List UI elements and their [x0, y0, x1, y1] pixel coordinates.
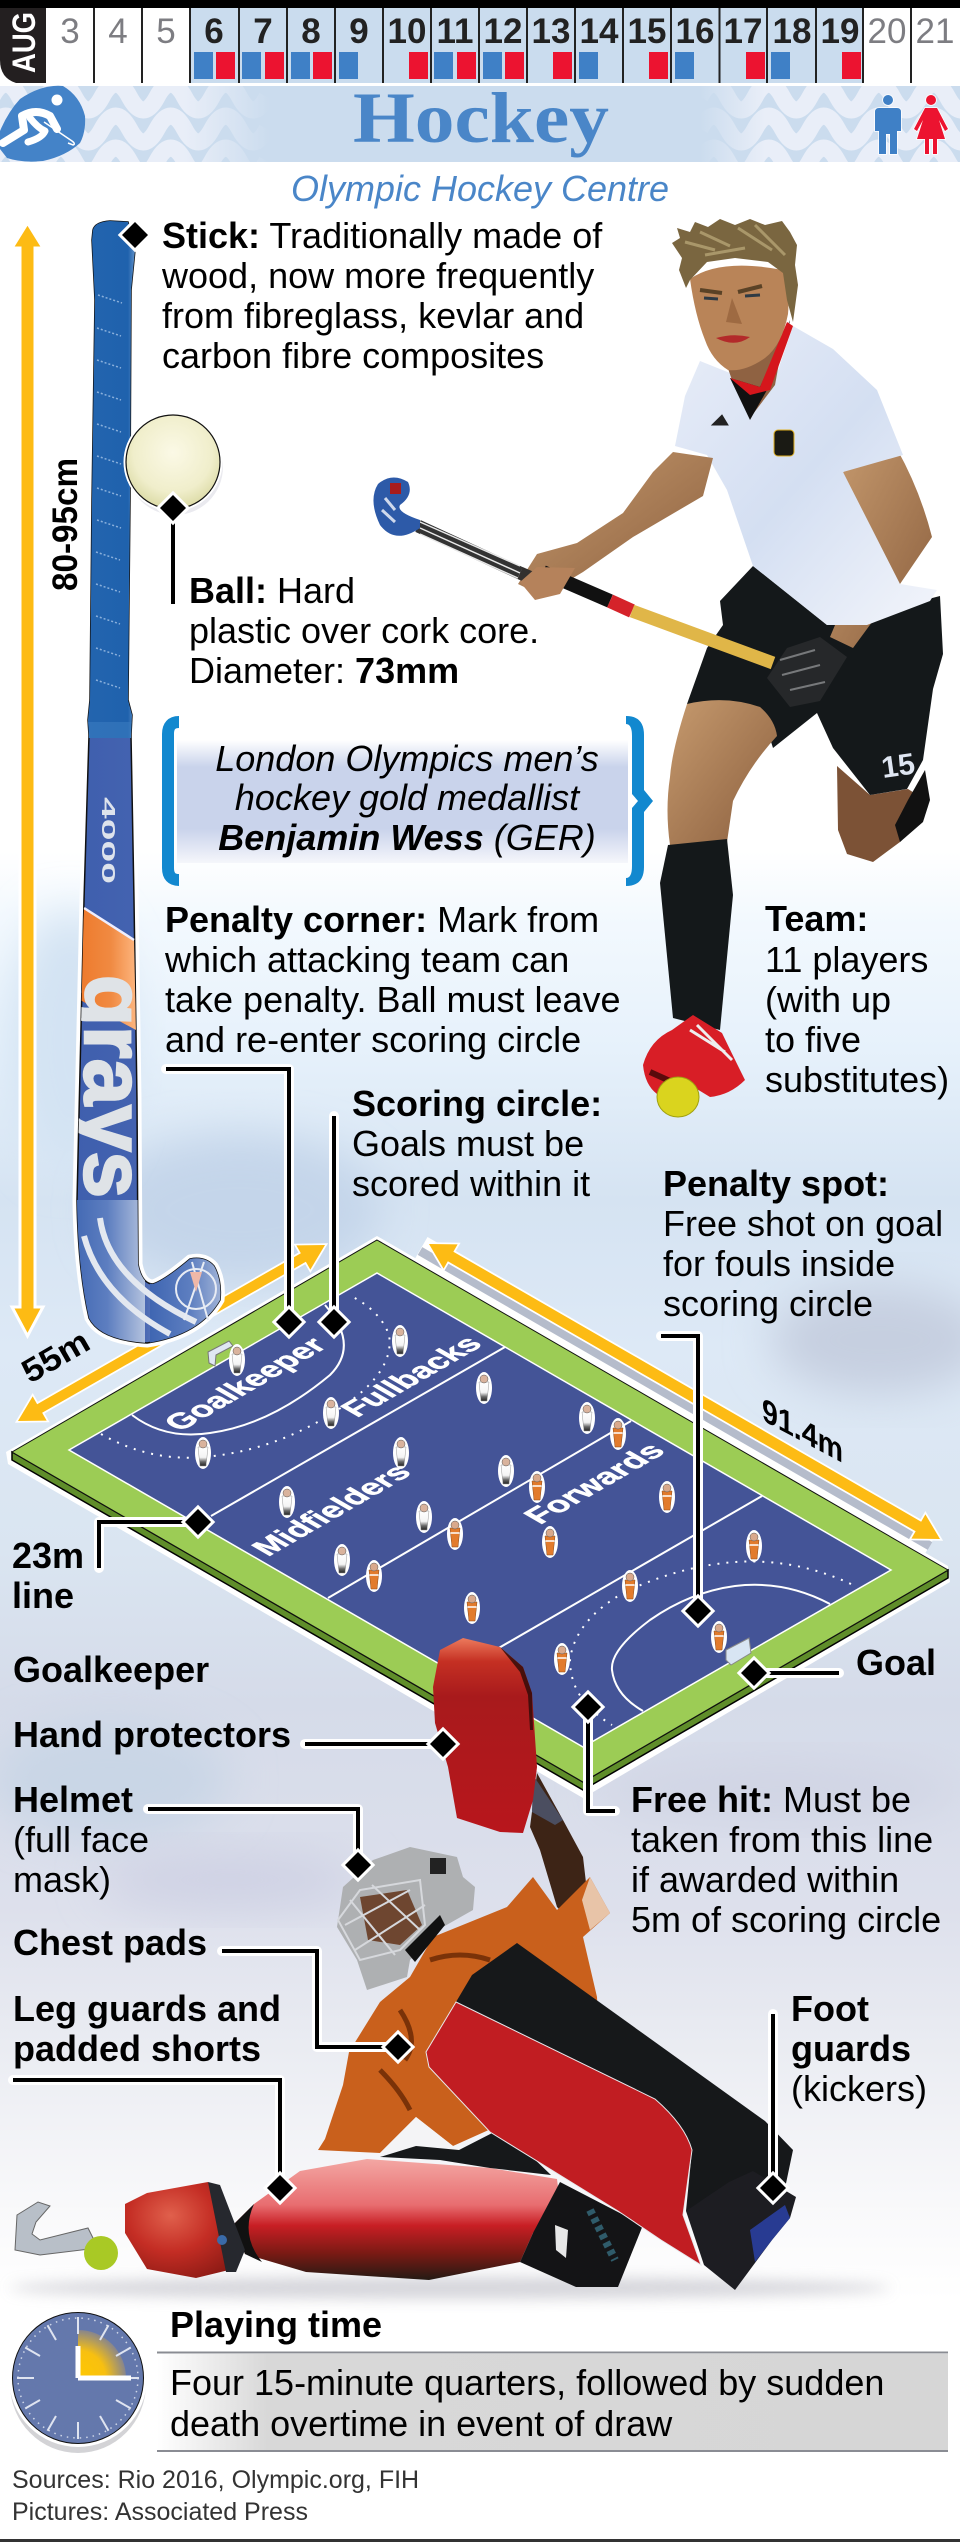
pointer: leg guards [13, 2080, 293, 2201]
calendar strip: August dates: 11 [436, 12, 474, 51]
arrow: pitch length 91.4m [429, 1244, 940, 1539]
photo illustration: goalkeeper [15, 1638, 796, 2290]
goalkeeper shorts [380, 2128, 551, 2175]
penalty corner text: Penalty corner: Mark from [165, 899, 599, 940]
calendar strip: August dates: 19 [821, 12, 859, 51]
player sock [660, 839, 733, 1030]
leg guards label [13, 1988, 281, 2069]
free hit text [631, 1779, 941, 1940]
month tab: AUG: AUG [6, 12, 42, 73]
pointer: scoring circle [321, 1116, 347, 1335]
penalty corner text: and re-enter scoring circle [165, 1019, 581, 1060]
helmet label: (full face [13, 1819, 149, 1860]
team text: substitutes) [765, 1059, 949, 1100]
player left arm [518, 452, 713, 596]
player right arm [830, 449, 932, 648]
raised leg pad: red side [426, 2002, 701, 2265]
held stick [373, 477, 773, 663]
stick text: Stick: Traditionally made of [162, 215, 603, 256]
calendar strip: August dates: 9 [349, 12, 369, 51]
stick text: carbon fibre composites [162, 335, 544, 376]
icon: male athlete [875, 95, 901, 154]
arrow: pitch width 55m [18, 1245, 325, 1421]
lower leg pad [233, 2159, 560, 2280]
calendar strip: August dates: 16 [676, 12, 714, 51]
ball text: Ball: Hard [189, 570, 355, 611]
playing time panel [157, 2304, 948, 2452]
player shorts [687, 566, 943, 795]
goalkeeper helmet [337, 1847, 475, 1990]
pitch label: Goalkeeper: Goalkeeper [156, 1333, 334, 1435]
calendar strip: August dates: 10 [388, 12, 426, 51]
dimension label: 55m: 55m [15, 1322, 96, 1390]
pointer: hand protectors [305, 1731, 456, 1757]
pointer: 23m line [99, 1509, 211, 1568]
goalkeeper heading: Goalkeeper [13, 1649, 209, 1690]
ball text: plastic over cork core. [189, 610, 539, 651]
stick text: from fibreglass, kevlar and [162, 295, 584, 336]
goal: left [208, 1341, 233, 1366]
23m line label [12, 1535, 84, 1616]
arrow: stick length 80-95cm [12, 223, 43, 1336]
pitch label: Fullbacks: Fullbacks [333, 1331, 490, 1421]
red hand glove [125, 2182, 239, 2278]
pointer: helmet [148, 1809, 371, 1878]
goal: right [726, 1638, 751, 1665]
ball under foot [657, 1077, 699, 1117]
penalty corner text: take penalty. Ball must leave [165, 979, 621, 1020]
free hit text: taken from this line [631, 1819, 933, 1860]
dimension label: 91.4m: 91.4m [762, 1390, 843, 1470]
player face [690, 266, 788, 370]
scoring circle text: scored within it [352, 1163, 590, 1204]
raised leg pad: black side [456, 1943, 793, 2211]
23m line label: 23m [12, 1535, 84, 1576]
boot lower [520, 2182, 643, 2287]
penalty spot text: Free shot on goal [663, 1203, 943, 1244]
title band with wave pattern [0, 86, 960, 162]
penalty corner text [164, 899, 621, 1060]
leg guards label: padded shorts [13, 2028, 261, 2069]
player glove [767, 637, 847, 707]
pointer: penalty spot [661, 1336, 711, 1624]
foot guards label: (kickers) [791, 2068, 927, 2109]
stick model number: 4000 [98, 797, 118, 884]
players: orange team [366, 1418, 762, 1675]
penalty spot text: Penalty spot: [663, 1163, 889, 1204]
calendar strip: August dates: 14 [580, 12, 619, 51]
helmet label [13, 1779, 149, 1900]
free hit text: 5m of scoring circle [631, 1899, 941, 1940]
number on shorts: 15 [879, 748, 917, 785]
pointer: penalty corner [166, 1069, 302, 1335]
free hit text: if awarded within [631, 1859, 899, 1900]
scoring circle text [352, 1083, 602, 1204]
chest pads label: Chest pads [13, 1922, 207, 1963]
goal label: Goal [856, 1642, 936, 1683]
sources: Sources: Rio 2016, Olympic.org, FIH [12, 2466, 419, 2494]
player front thigh [668, 700, 777, 845]
month tab: AUG [0, 8, 46, 83]
stick logo: grays: grays [66, 975, 161, 1198]
free hit text: Free hit: Must be [631, 1779, 911, 1820]
calendar strip: August dates: 12 [484, 12, 522, 51]
calendar strip: August dates [0, 8, 954, 83]
player hair [672, 219, 798, 322]
calendar strip: August dates: 20 [868, 12, 906, 51]
calendar strip: August dates: 15 [628, 12, 666, 51]
pointer: goal [741, 1660, 839, 1686]
goalkeeper jersey [318, 1877, 610, 2153]
player back leg [837, 766, 927, 862]
penalty spot text: for fouls inside [663, 1243, 895, 1284]
hockey pitch diagram [6, 1236, 950, 1798]
hand protector [433, 1638, 537, 1833]
calendar strip: August dates: 4 [108, 12, 128, 51]
pointer: free hit [575, 1694, 615, 1811]
players: white team [195, 1325, 595, 1576]
scoring circle text: Goals must be [352, 1123, 584, 1164]
dropped stick [15, 2202, 98, 2255]
hook emblem [176, 1262, 216, 1320]
stick text: wood, now more frequently [161, 255, 594, 296]
icon: hockey pictogram [0, 86, 85, 162]
helmet label: Helmet [13, 1779, 133, 1820]
helmet label: mask) [13, 1859, 111, 1900]
player shirt [675, 326, 937, 625]
scoring circle text: Scoring circle: [352, 1083, 602, 1124]
shadow under goalkeeper [10, 2277, 890, 2299]
sources [12, 2466, 419, 2526]
stick text [161, 215, 603, 376]
pitch label: Midfielders: Midfielders [244, 1460, 419, 1560]
hand protectors label: Hand protectors [13, 1714, 291, 1755]
player neck [725, 330, 785, 418]
penalty spot text [663, 1163, 943, 1324]
calendar strip: August dates: 6 [204, 12, 224, 51]
playing time panel: Four 15-minute quarters, followed by sudden [170, 2362, 884, 2403]
team text: to five [765, 1019, 861, 1060]
hockey stick [66, 221, 230, 1350]
team text: Team: [765, 898, 868, 939]
title: Hockey [353, 78, 609, 158]
goalkeeper raised arm [530, 1773, 590, 1927]
clock icon [9, 2309, 147, 2453]
team text: (with up [765, 979, 891, 1020]
callout: gold medallist: hockey gold medallist [235, 777, 581, 818]
calendar strip: August dates: 7 [253, 12, 273, 51]
penalty corner text: which attacking team can [164, 939, 569, 980]
calendar strip: August dates: 13 [532, 12, 570, 51]
ball text [189, 570, 539, 691]
icon: female athlete [914, 95, 948, 154]
player shoe [643, 1015, 745, 1097]
callout: gold medallist: London Olympics men’s [215, 738, 599, 779]
player hand [520, 567, 575, 600]
team text: 11 players [765, 939, 928, 980]
calendar strip: August dates: 17 [724, 12, 762, 51]
playing time panel: Playing time [170, 2304, 382, 2345]
foot guards label: guards [791, 2028, 911, 2069]
pointer: chest pads [222, 1951, 411, 2060]
calendar strip: August dates: 3 [60, 12, 80, 51]
pointer: ball [160, 495, 186, 604]
sources: Pictures: Associated Press [12, 2498, 308, 2526]
pointer: foot guards [760, 2014, 786, 2201]
loose ball [84, 2236, 118, 2270]
bottom rule [0, 2539, 960, 2542]
foot guards label [791, 1988, 927, 2109]
penalty spot text: scoring circle [663, 1283, 873, 1324]
ball text: Diameter: 73mm [189, 650, 459, 691]
photo illustration: Benjamin Wess [373, 219, 943, 1117]
venue name: Olympic Hockey Centre [291, 168, 669, 209]
dimension label: 80-95cm: 80-95cm [46, 458, 85, 591]
foot guards label: Foot [791, 1988, 869, 2029]
callout: gold medallist: Benjamin Wess (GER) [218, 817, 596, 858]
23m line label: line [12, 1575, 74, 1616]
calendar strip: August dates: 21 [916, 12, 954, 51]
calendar strip: August dates: 5 [156, 12, 176, 51]
callout: gold medallist [168, 716, 653, 886]
leg guards label: Leg guards and [13, 1988, 281, 2029]
ball illustration [126, 415, 223, 515]
playing time panel: death overtime in event of draw [170, 2403, 673, 2444]
foot guard [686, 2171, 796, 2290]
top black strip [0, 0, 960, 8]
pointer: stick [122, 222, 148, 248]
calendar strip: August dates: 18 [773, 12, 811, 51]
calendar strip: August dates: 8 [301, 12, 321, 51]
pitch label: Forwards: Forwards [516, 1438, 673, 1528]
team text [765, 898, 949, 1100]
